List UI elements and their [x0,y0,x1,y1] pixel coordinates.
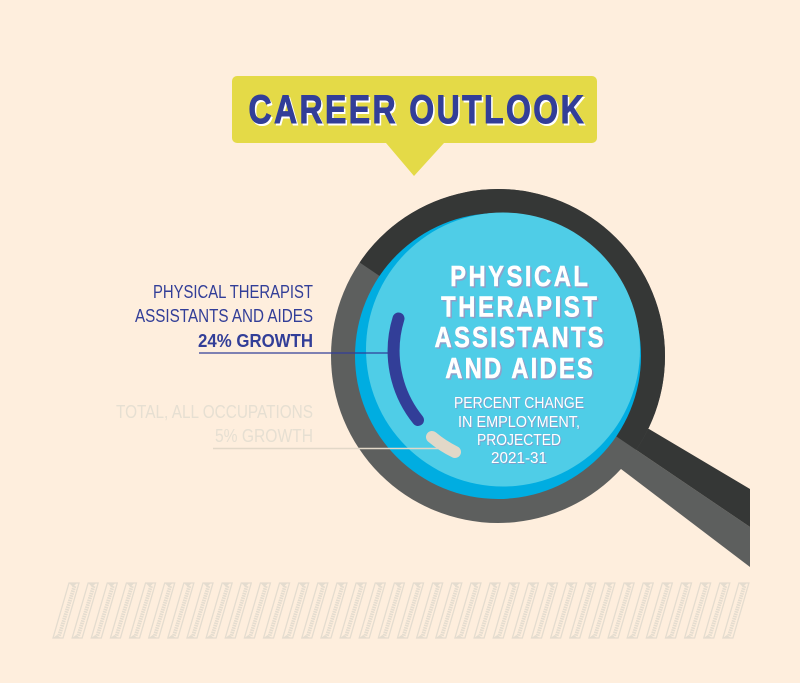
label: physical therapist assistants and aides: 24% GROWTH [198,331,313,351]
lens rim lower [331,189,665,523]
label: physical therapist assistants and aides: PHYSICAL THERAPIST [153,282,313,302]
lens subheading: PROJECTED [478,433,562,450]
label: physical therapist assistants and aides [135,282,313,351]
title: CAREER OUTLOOK [248,87,584,132]
lens outer blue [355,213,641,499]
lens subheading: PROJECTED [477,432,561,449]
hatched ground strip [53,583,749,638]
label: physical therapist assistants and aides: ASSISTANTS AND AIDES [135,306,313,326]
handle [590,426,750,567]
label: total, all occupations [116,402,313,446]
lens subheading: 2021-31 [492,451,548,468]
label: total, all occupations: 5% GROWTH [215,426,313,446]
lens heading: AND AIDES [445,352,593,385]
title: CAREER OUTLOOK [250,89,585,134]
lens rim upper [360,189,665,450]
lens subheading: IN EMPLOYMENT, [458,414,580,431]
growth arc: 5% [432,437,455,452]
label: total, all occupations: TOTAL, ALL OCCUPATIONS [116,402,313,422]
lens subheading: PERCENT CHANGE [454,395,584,412]
lens heading: THERAPIST [443,292,598,325]
lens subheading: PERCENT CHANGE [455,396,585,413]
lens subheading [454,395,585,468]
lens heading: ASSISTANTS [436,322,605,355]
lens inner blue [366,212,640,486]
magnifying glass [331,189,750,567]
growth arc: 24% [394,318,418,420]
connector line: physical therapist assistants [199,352,392,354]
lens heading: AND AIDES [447,353,594,386]
lens heading: THERAPIST [441,290,597,323]
lens heading: PHYSICAL [450,260,588,293]
lens subheading: 2021-31 [491,450,547,467]
lens subheading: IN EMPLOYMENT, [459,415,581,432]
connector line: total [213,448,440,450]
title callout [232,76,597,176]
lens heading: ASSISTANTS [435,321,603,354]
lens heading [435,260,605,386]
lens heading: PHYSICAL [452,261,589,294]
